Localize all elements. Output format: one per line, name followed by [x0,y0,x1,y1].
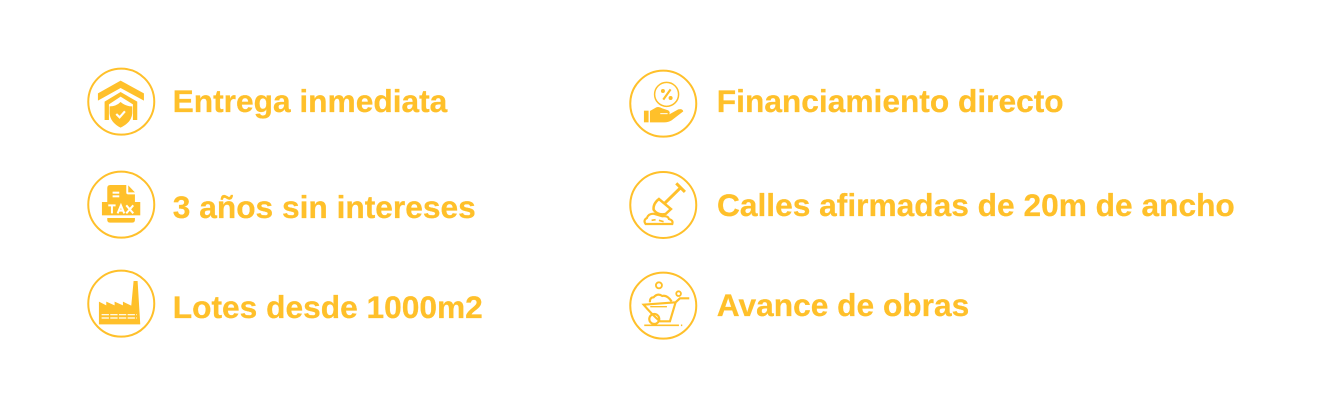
icon: wheelbarrow [630,273,696,339]
icon: tax document [88,172,154,238]
label: Avance de obras: Avance de obras [717,287,969,323]
icon: shovel and soil [630,172,696,238]
icon: factory [88,271,154,337]
label: Entrega inmediata: Entrega inmediata [173,83,448,119]
icon: house with shield [88,69,154,135]
label: Calles afirmadas de 20m de ancho: Calles afirmadas de 20m de ancho [717,187,1235,223]
label: Lotes desde 1000m2: Lotes desde 1000m2 [173,289,483,325]
label: 3 años sin intereses: 3 años sin intereses [173,189,476,225]
label: Financiamiento directo: Financiamiento directo [717,83,1064,119]
icon: hand with percent coin [630,71,696,137]
